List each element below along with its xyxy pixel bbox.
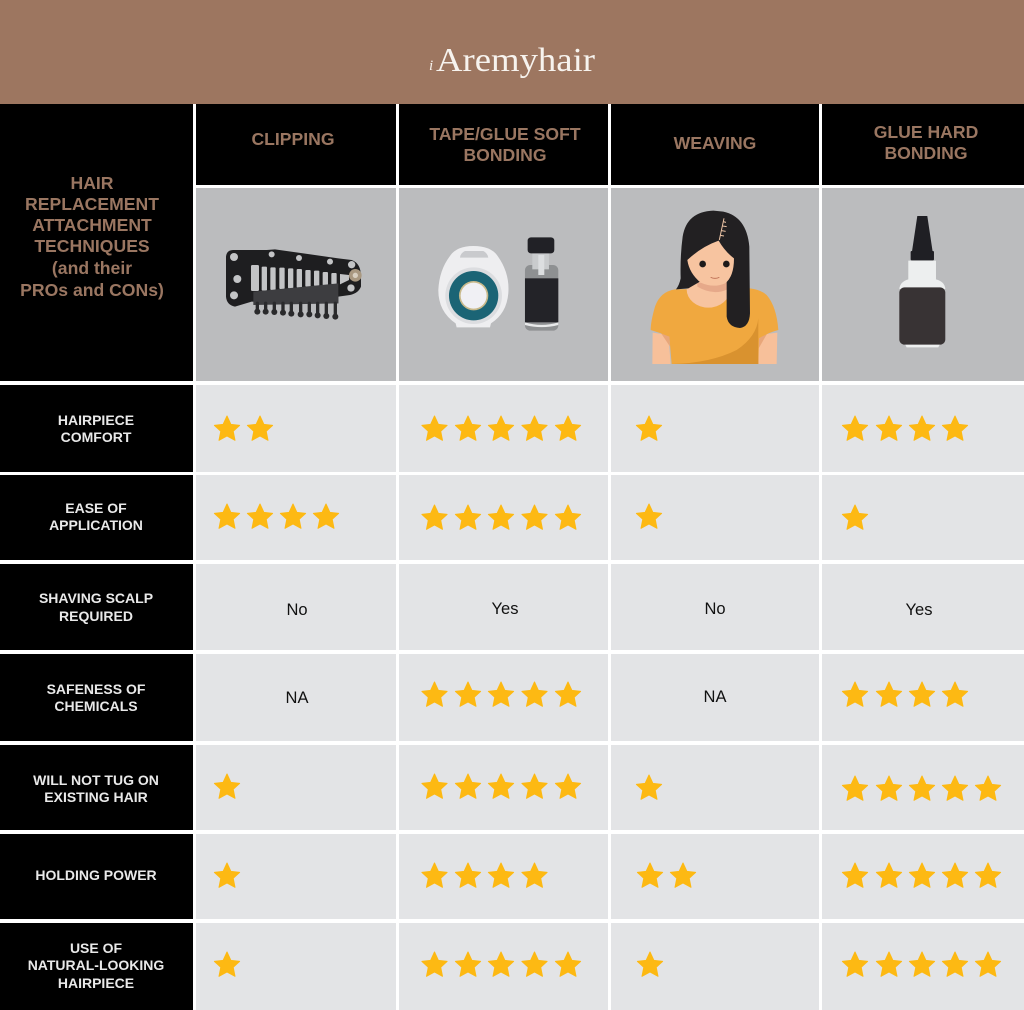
row: hairpiece comfort: COMFORT bbox=[61, 429, 132, 445]
row: safeness of chemicals: NA bbox=[704, 688, 726, 706]
icon: hair clip bbox=[226, 249, 362, 320]
row: holding power: HOLDING POWER bbox=[35, 867, 157, 883]
row: hairpiece comfort bbox=[0, 385, 1024, 472]
logo: Aremyhair bbox=[436, 42, 596, 79]
row: shaving scalp required: REQUIRED bbox=[59, 608, 133, 624]
logo: i bbox=[429, 58, 433, 74]
row: shaving scalp required: SHAVING SCALP bbox=[39, 590, 153, 606]
row: use of natural-looking hairpiece bbox=[0, 923, 1024, 1010]
image panel backgrounds bbox=[196, 188, 1024, 381]
row: shaving scalp required: Yes bbox=[906, 601, 932, 619]
icon: tape dispenser bbox=[438, 246, 509, 327]
row: will not tug on existing hair: WILL NOT TUG ON bbox=[33, 772, 159, 788]
row: shaving scalp required bbox=[0, 564, 1024, 650]
column heading: glue hard bonding: GLUE HARD bbox=[874, 122, 978, 142]
column heading: weaving bbox=[611, 104, 819, 185]
row: use of natural-looking hairpiece: USE OF bbox=[70, 940, 123, 956]
panel: table title: HAIR bbox=[70, 173, 114, 193]
row: ease of application: APPLICATION bbox=[49, 517, 143, 533]
panel: table title: ATTACHMENT bbox=[32, 215, 152, 235]
column heading: clipping: CLIPPING bbox=[251, 129, 335, 149]
icon: adhesive vial bbox=[525, 237, 558, 331]
row: hairpiece comfort: HAIRPIECE bbox=[58, 412, 134, 428]
icon: woman with weave bbox=[651, 211, 778, 364]
panel: table title bbox=[0, 104, 193, 381]
column heading: tape/glue soft bonding: BONDING bbox=[463, 145, 547, 165]
icon: glue bottle bbox=[899, 216, 945, 347]
row: safeness of chemicals bbox=[0, 654, 1024, 741]
column heading: tape/glue soft bonding: TAPE/GLUE SOFT bbox=[429, 124, 581, 144]
row: will not tug on existing hair: EXISTING HAIR bbox=[44, 789, 148, 805]
row: use of natural-looking hairpiece: HAIRPIECE bbox=[58, 975, 134, 991]
row: safeness of chemicals: CHEMICALS bbox=[54, 698, 138, 714]
column heading: glue hard bonding: BONDING bbox=[884, 143, 968, 163]
column heading: tape/glue soft bonding bbox=[399, 104, 608, 185]
row: safeness of chemicals: SAFENESS OF bbox=[47, 681, 146, 697]
panel: table title: (and their bbox=[52, 258, 132, 278]
panel: table title: TECHNIQUES bbox=[34, 236, 150, 256]
row: shaving scalp required: No bbox=[286, 601, 308, 619]
row: ease of application: EASE OF bbox=[65, 500, 127, 516]
column heading: weaving: WEAVING bbox=[674, 133, 756, 153]
panel: table title: REPLACEMENT bbox=[25, 194, 159, 214]
column heading: glue hard bonding bbox=[822, 104, 1024, 185]
row: safeness of chemicals: NA bbox=[286, 689, 308, 707]
row: ease of application bbox=[0, 475, 1024, 560]
row: use of natural-looking hairpiece: NATURAL-LOOKING bbox=[28, 957, 164, 973]
row: will not tug on existing hair bbox=[0, 745, 1024, 830]
header band bbox=[0, 0, 1024, 104]
panel: table title: PROs and CONs) bbox=[20, 280, 164, 300]
row: shaving scalp required: No bbox=[704, 600, 726, 618]
row: holding power bbox=[0, 834, 1024, 919]
row: shaving scalp required: Yes bbox=[492, 600, 518, 618]
column heading: clipping bbox=[196, 104, 396, 185]
